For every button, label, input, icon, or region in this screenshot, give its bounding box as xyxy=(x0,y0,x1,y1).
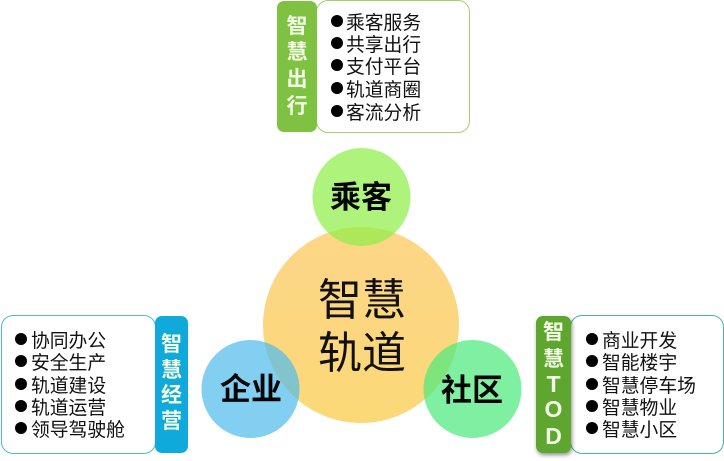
tab: smart TOD: O xyxy=(545,396,562,422)
tab: smart mobility: 行 xyxy=(286,95,308,118)
item: 智慧物业 xyxy=(602,397,677,418)
central title: 智慧 xyxy=(318,276,406,325)
list box: smart TOD xyxy=(570,315,724,454)
tab: smart TOD xyxy=(536,316,571,453)
circle: passengers xyxy=(312,148,410,246)
tab: smart mobility xyxy=(277,1,317,132)
list box: smart operations xyxy=(1,315,156,454)
item: 智慧小区 xyxy=(602,419,677,440)
tab: smart operations: 慧 xyxy=(161,359,182,382)
tab: smart TOD: 慧 xyxy=(543,348,564,371)
item: 乘客服务 xyxy=(346,12,421,33)
label: passengers: 乘客 xyxy=(330,180,392,215)
item: 轨道建设 xyxy=(31,375,106,396)
tab: smart mobility: 智 xyxy=(286,15,308,38)
tab: smart TOD: T xyxy=(546,371,561,397)
item: 协同办公 xyxy=(31,330,106,351)
central circle xyxy=(263,227,459,423)
tab: smart mobility: 慧 xyxy=(286,41,308,64)
tab: smart operations: 营 xyxy=(161,410,182,433)
item: 共享出行 xyxy=(346,34,421,55)
item: 领导驾驶舱 xyxy=(31,419,125,440)
item: 支付平台 xyxy=(346,56,421,77)
item: 轨道商圈 xyxy=(346,79,421,100)
list box: smart mobility xyxy=(316,0,470,133)
tab: smart TOD: 智 xyxy=(543,321,564,344)
panel: smart operations xyxy=(1,315,188,454)
label: community: 社区 xyxy=(441,373,503,408)
label: enterprise: 企业 xyxy=(220,372,282,407)
item: 商业开发 xyxy=(602,330,677,351)
tab: smart operations: 经 xyxy=(161,384,182,407)
item: 安全生产 xyxy=(31,352,106,373)
tab: smart operations: 智 xyxy=(161,333,182,356)
circle: community xyxy=(424,340,522,438)
tab: smart operations xyxy=(155,316,188,453)
tab: smart TOD: D xyxy=(545,423,562,449)
circle: enterprise xyxy=(202,340,300,438)
panel: smart mobility xyxy=(277,0,470,133)
item: 智能楼宇 xyxy=(602,352,677,373)
item: 智慧停车场 xyxy=(602,375,696,396)
tab: smart mobility: 出 xyxy=(286,68,308,91)
item: 轨道运营 xyxy=(31,397,106,418)
panel: smart TOD xyxy=(534,315,724,458)
item: 客流分析 xyxy=(346,102,421,123)
central title line 2: 轨道 xyxy=(318,329,406,378)
